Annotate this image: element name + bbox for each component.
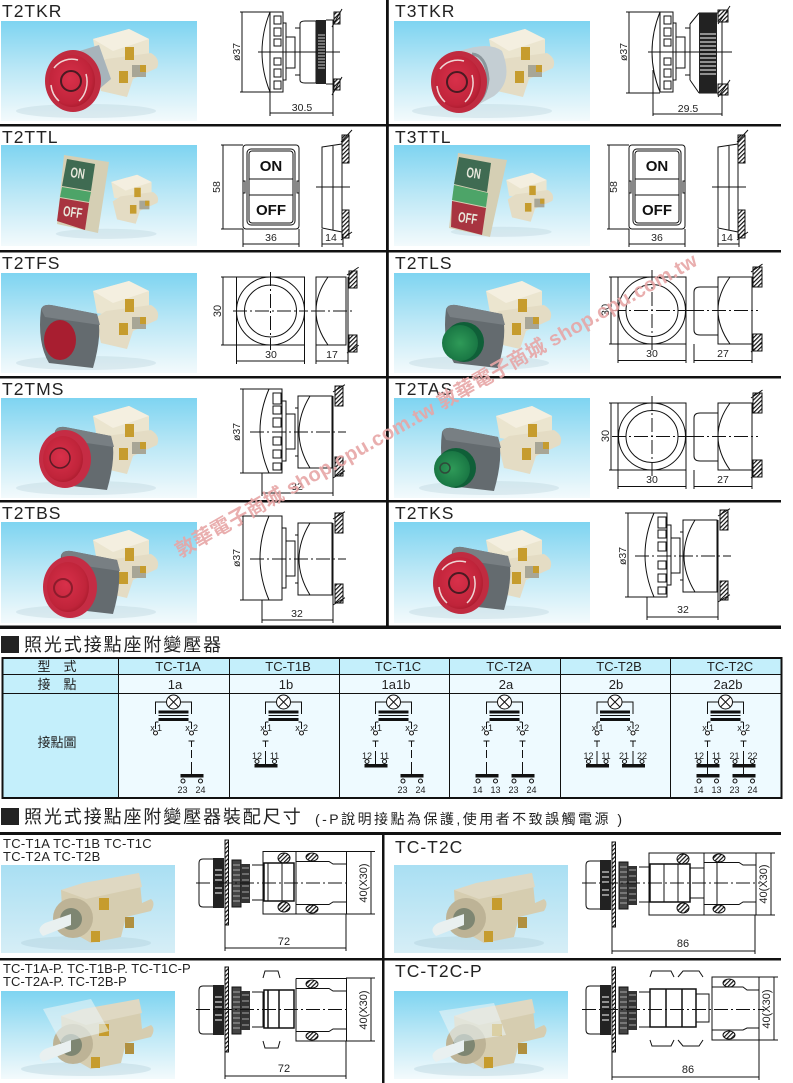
photo: T3TKR	[394, 21, 590, 121]
drawing: assembly 72	[196, 840, 375, 951]
photo: assembly with cover	[1, 991, 175, 1079]
drawing: T2TTL: 58	[211, 181, 223, 193]
drawing: T2TLS: 27	[717, 348, 729, 360]
heading: T3TKR: T3TKR	[395, 1, 455, 21]
panel: T2TKS	[394, 503, 731, 623]
row labels: 接點圖	[37, 735, 77, 750]
diagram: TC-T1C: 12	[362, 751, 372, 761]
drawing: T2TMS: 32	[291, 481, 303, 493]
drawing: T2TLS	[600, 263, 764, 363]
diagram: TC-T1C: x	[370, 723, 375, 733]
contact types	[168, 677, 742, 692]
photo: T2TTL	[1, 145, 197, 246]
model list: TC-T1A TC-T1B TC-T1C	[3, 836, 152, 851]
diagram: TC-T2A: 23	[508, 785, 519, 795]
diagram: TC-T2C: 2	[745, 723, 750, 733]
drawing: T2TTL: 14	[325, 232, 337, 244]
drawing: T2TTL	[211, 130, 352, 247]
drawing: T2TMS	[231, 384, 346, 496]
panel: T2TAS	[394, 379, 764, 498]
diagram: TC-T1B: 12	[252, 751, 262, 761]
diagram: TC-T1A: 2	[193, 723, 198, 733]
diagram: TC-T2A: 1	[488, 723, 493, 733]
drawing: T2TKR	[231, 9, 342, 116]
diagram: TC-T2B	[583, 695, 647, 768]
diagram: TC-T2C	[693, 695, 758, 795]
contact types: 2a2b	[714, 677, 742, 692]
drawing: assembly 86: 86	[677, 938, 689, 950]
diagram: TC-T1A: x	[150, 723, 155, 733]
diagram: TC-T1A: 24	[195, 785, 206, 795]
diagram: TC-T2A: 24	[526, 785, 537, 795]
panel: T2TBS	[1, 503, 346, 623]
diagram: TC-T1B: 11	[270, 751, 279, 761]
diagram: TC-T2A: 2	[524, 723, 529, 733]
diagram: TC-T2A: x	[481, 723, 486, 733]
column headers: TC-T2C	[707, 659, 753, 674]
heading: TC-T2C-P: TC-T2C-P	[395, 961, 483, 981]
diagram: TC-T2C: 11	[712, 751, 721, 761]
diagram: TC-T2A: 13	[490, 785, 501, 795]
diagram: TC-T1C: 2	[413, 723, 418, 733]
diagram: TC-T2C: 12	[694, 751, 704, 761]
diagram: TC-T2C: 23	[729, 785, 740, 795]
diagram: TC-T2A: 14	[472, 785, 483, 795]
diagram: TC-T2B: 21	[619, 751, 629, 761]
diagram: TC-T1C: 1	[377, 723, 382, 733]
panel: TC-T2C assembly	[394, 837, 775, 954]
section heading: 照光式接點座附變壓器裝配尺寸: (-P說明接點為保護,使用者不致誤觸電源 )	[315, 811, 622, 827]
diagram: TC-T1C	[362, 695, 426, 795]
diagram: TC-T2C: x	[702, 723, 707, 733]
model list: TC-T2A-P. TC-T2B-P	[3, 974, 127, 989]
drawing: T2TKS	[617, 508, 731, 620]
drawing: T2TAS: 30	[600, 430, 612, 442]
drawing: assembly 72: 72	[278, 936, 290, 948]
column headers: TC-T2A	[486, 659, 532, 674]
heading: T2TKS: T2TKS	[395, 503, 454, 523]
drawing: T3TTL: 58	[608, 181, 620, 193]
photo: T2TKS	[394, 522, 590, 623]
heading: T3TTL: T3TTL	[395, 127, 452, 147]
drawing: assembly 72 with cover: 40(X30)	[358, 990, 370, 1030]
drawing: T2TFS	[212, 267, 359, 364]
drawing: T2TKR: ø37	[231, 43, 243, 61]
heading: T2TBS: T2TBS	[2, 503, 61, 523]
photo: T3TTL	[394, 145, 590, 246]
panel: T3TKR	[394, 1, 732, 121]
drawing: T2TKR: 30.5	[292, 102, 312, 114]
diagram: TC-T2C: x	[737, 723, 742, 733]
diagram: TC-T1B: 2	[303, 723, 308, 733]
watermark: 敦華電子商城 shop.cpu.com.tw 敦華電子商城 shop.cpu.com.tw	[171, 248, 702, 562]
column headers	[155, 659, 753, 674]
panel: T3TTL	[394, 127, 748, 247]
drawing: assembly 72: 40(X30)	[358, 863, 370, 903]
heading: T2TFS: T2TFS	[2, 253, 60, 273]
diagram: TC-T2B: 22	[637, 751, 647, 761]
drawing: assembly 86 with cover: 40(X30)	[761, 989, 773, 1029]
drawing: T3TKR: ø37	[618, 43, 630, 61]
diagram: TC-T2A	[472, 695, 537, 795]
divider grid	[0, 0, 781, 629]
drawing: assembly 72 with cover: 72	[278, 1063, 290, 1075]
photo: assembly	[1, 865, 175, 953]
diagram: TC-T1C: x	[405, 723, 410, 733]
diagram: TC-T1A	[150, 695, 206, 795]
heading: T2TTL: T2TTL	[2, 127, 59, 147]
diagram: TC-T2C: 1	[709, 723, 714, 733]
model list: TC-T1A-P. TC-T1B-P. TC-T1C-P	[3, 961, 191, 976]
diagram: TC-T2C: 24	[747, 785, 758, 795]
diagram: TC-T1A: 1	[157, 723, 162, 733]
drawing: assembly 86 with cover	[582, 967, 778, 1080]
drawing: T2TAS: 30	[646, 474, 658, 486]
drawing: T3TTL: 36	[651, 232, 663, 244]
drawing: T2TLS: 30	[646, 348, 658, 360]
panel: TC-T2C-P assembly	[394, 961, 778, 1080]
panel: T2TFS	[1, 253, 359, 373]
drawing: T2TFS: 30	[265, 349, 277, 361]
panel: T2TTL	[1, 127, 352, 247]
row labels: 接 點	[37, 677, 77, 692]
section heading: 照光式接點座附變壓器: 照光式接點座附變壓器	[24, 635, 223, 655]
diagram: TC-T1A: 23	[177, 785, 188, 795]
section heading: 照光式接點座附變壓器裝配尺寸	[1, 807, 622, 827]
drawing: T2TTL: 36	[265, 232, 277, 244]
drawing: T2TBS	[231, 511, 346, 623]
diagram: TC-T2A: x	[516, 723, 521, 733]
contact types: 1a	[168, 677, 183, 692]
diagram: TC-T2C: 21	[729, 751, 740, 761]
contact types: 1a1b	[382, 677, 410, 692]
column headers: TC-T1A	[155, 659, 201, 674]
panel: T2TLS	[394, 253, 764, 373]
table: contact specifications	[2, 658, 782, 798]
panel: TC-T1A-P assembly	[1, 961, 375, 1079]
drawing: assembly 72 with cover	[196, 967, 375, 1079]
diagram: TC-T1B: 1	[267, 723, 272, 733]
photo: T3TTL: ON	[465, 164, 482, 182]
drawing: T2TKS: ø37	[617, 547, 629, 565]
drawing: T2TTL: OFF	[256, 202, 286, 219]
diagram: TC-T2B: 1	[598, 723, 604, 733]
diagram: TC-T2B: 2	[634, 723, 640, 733]
contact types: 2b	[609, 677, 623, 692]
row labels: 型 式	[37, 659, 77, 674]
drawing: T2TBS: ø37	[231, 549, 243, 567]
drawing: T2TAS: 27	[717, 474, 729, 486]
diagram: TC-T2B: x	[627, 723, 632, 733]
drawing: T2TBS: 32	[291, 608, 303, 620]
drawing: T2TTL: ON	[260, 158, 282, 175]
column headers: TC-T1B	[265, 659, 311, 674]
diagram: TC-T1B: x	[295, 723, 300, 733]
contact types: 2a	[499, 677, 514, 692]
heading: T2TLS: T2TLS	[395, 253, 453, 273]
panel: T2TKR	[1, 1, 342, 121]
model list: TC-T2A TC-T2B	[3, 849, 101, 864]
diagram: TC-T1C: 24	[415, 785, 426, 795]
heading: TC-T2C: TC-T2C	[395, 837, 463, 857]
diagram: TC-T2C: 13	[711, 785, 722, 795]
photo: TC-T2C	[394, 865, 568, 953]
photo: T2TAS	[394, 398, 590, 498]
drawing: assembly 86 with cover: 86	[682, 1064, 694, 1076]
diagram: TC-T1C: 23	[397, 785, 408, 795]
photo: T2TKR	[1, 21, 197, 121]
heading: T2TAS: T2TAS	[395, 379, 453, 399]
drawing: T3TTL: ON	[646, 158, 668, 175]
drawing: T3TTL: OFF	[642, 202, 672, 219]
diagram: TC-T2B: 11	[601, 751, 611, 761]
photo: T2TFS	[1, 273, 197, 373]
column headers: TC-T1C	[375, 659, 421, 674]
photo: T2TTL: OFF	[62, 203, 84, 222]
diagram: TC-T2C: 22	[747, 751, 758, 761]
diagram: TC-T1B: x	[260, 723, 265, 733]
model list	[3, 961, 191, 989]
model list	[3, 836, 152, 864]
diagram: TC-T2B: x	[592, 723, 597, 733]
photo: T2TLS	[394, 273, 590, 373]
photo: T3TTL: OFF	[457, 209, 479, 228]
photo: T2TTL: ON	[69, 164, 86, 182]
drawing: assembly 86	[582, 842, 775, 954]
row labels	[37, 659, 77, 750]
drawing: T3TKR: 29.5	[678, 103, 698, 115]
diagram: TC-T2B: 12	[583, 751, 594, 761]
drawing: T2TLS: 30	[600, 304, 612, 316]
panel: TC-T1A assembly	[1, 836, 375, 953]
photo: TC-T2C-P	[394, 991, 568, 1079]
divider grid: assembly	[0, 832, 781, 1083]
drawing: T2TFS: 30	[212, 305, 224, 317]
heading: T2TKR: T2TKR	[2, 1, 62, 21]
drawing: T2TMS: ø37	[231, 423, 243, 441]
diagram: TC-T1C: 11	[380, 751, 389, 761]
drawing: T3TKR	[618, 6, 732, 116]
column headers: TC-T2B	[596, 659, 642, 674]
diagram: TC-T1A: x	[185, 723, 190, 733]
panel: T2TMS	[1, 379, 346, 498]
diagram: TC-T1B	[252, 695, 308, 768]
drawing: T3TTL	[607, 130, 748, 247]
drawing: assembly 86: 40(X30)	[758, 864, 770, 904]
contact types: 1b	[279, 677, 293, 692]
diagram: TC-T2C: 14	[693, 785, 704, 795]
drawing: T2TKS: 32	[677, 604, 689, 616]
photo: T2TBS	[1, 522, 197, 623]
heading: T2TMS: T2TMS	[2, 379, 64, 399]
drawing: T2TFS: 17	[326, 349, 338, 361]
photo: T2TMS	[1, 398, 197, 498]
drawing: T3TTL: 14	[721, 232, 733, 244]
section heading: 照光式接點座附變壓器裝配尺寸: 照光式接點座附變壓器裝配尺寸	[24, 807, 303, 827]
drawing: T2TAS	[600, 389, 764, 489]
